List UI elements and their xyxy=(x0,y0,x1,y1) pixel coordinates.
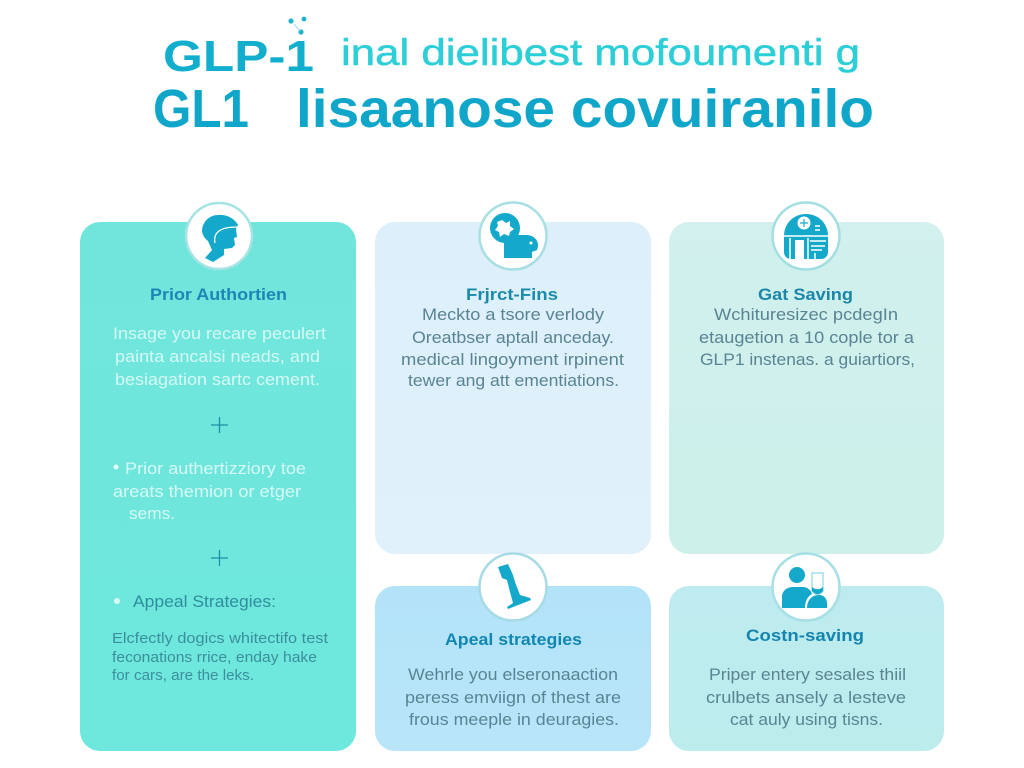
text block: Priper entery sesales thiil xyxy=(709,665,906,684)
title line 1: inal dielibest mofoumenti g xyxy=(341,32,860,73)
text block: Meckto a tsore verlody xyxy=(422,305,605,324)
text block: frous meeple in deuragies. xyxy=(409,710,619,729)
text block: etaugetion a 10 cople tor a xyxy=(699,328,915,347)
title xyxy=(153,32,874,139)
heading: Frjrct-Fins xyxy=(466,285,558,304)
text block: closing note: Elcfectly dogics whitectifo test xyxy=(112,630,329,647)
text block: Oreatbser aptall anceday. xyxy=(412,328,614,347)
text block: Wchituresizec pcdegIn xyxy=(714,305,898,324)
text block xyxy=(401,305,624,390)
panel: appeal strategies xyxy=(375,554,651,751)
text block: Wehrle you elseronaaction xyxy=(408,665,618,684)
panel: prior authorization xyxy=(80,203,356,751)
text block: bullet one: sems. xyxy=(129,504,175,523)
text block: bullet one: areats themion or etger xyxy=(113,482,301,501)
text block: crulbets ansely a lesteve xyxy=(706,688,906,707)
heading: Apeal strategies xyxy=(445,630,582,649)
icon: head profile xyxy=(186,203,252,269)
text block: intro: painta ancalsi neads, and xyxy=(115,347,320,366)
text block: closing note: for cars, are the leks. xyxy=(112,667,254,684)
text block: GLP1 instenas. a guiartiors, xyxy=(700,350,915,369)
heading: Prior Authortien xyxy=(150,285,287,304)
icon: pillar xyxy=(480,554,546,620)
text block: appeal strategies: Appeal Strategies: xyxy=(133,592,276,611)
panel: gat saving xyxy=(669,202,944,554)
title line 2: GL1 xyxy=(153,79,249,139)
text block: cat auly using tisns. xyxy=(730,710,883,729)
title line 1 xyxy=(163,32,860,81)
text block xyxy=(699,305,915,369)
text block: peress emviign of thest are xyxy=(405,688,621,707)
text block: intro: besiagation sartc cement. xyxy=(115,370,320,389)
text block xyxy=(706,665,906,729)
icon: plus xyxy=(211,550,228,566)
icon: person with device xyxy=(772,554,840,620)
icon: molecule dots xyxy=(288,17,306,35)
text block xyxy=(405,665,621,729)
heading: Gat Saving xyxy=(758,285,853,304)
panel: friction xyxy=(375,202,651,554)
text block: closing note xyxy=(112,630,329,684)
heading: Costn-saving xyxy=(746,626,864,645)
icon: plus xyxy=(211,417,228,433)
text block: tewer ang att ementiations. xyxy=(408,371,619,390)
title line 1: GLP-1 xyxy=(163,32,314,81)
panel: cost saving xyxy=(669,554,944,751)
icon: building with clock xyxy=(772,202,840,270)
title line 2: lisaanose covuiranilo xyxy=(296,79,874,139)
text block: bullet one: Prior authertizziory toe xyxy=(125,459,306,478)
text block: medical lingoyment irpinent xyxy=(401,350,624,369)
icon: puzzle and shirt xyxy=(480,202,546,270)
text block: intro: Insage you recare peculert xyxy=(113,324,326,343)
text block: closing note: feconations rrice, enday hake xyxy=(112,649,317,666)
text block: bullet one xyxy=(113,459,306,523)
text block: intro xyxy=(113,324,326,389)
